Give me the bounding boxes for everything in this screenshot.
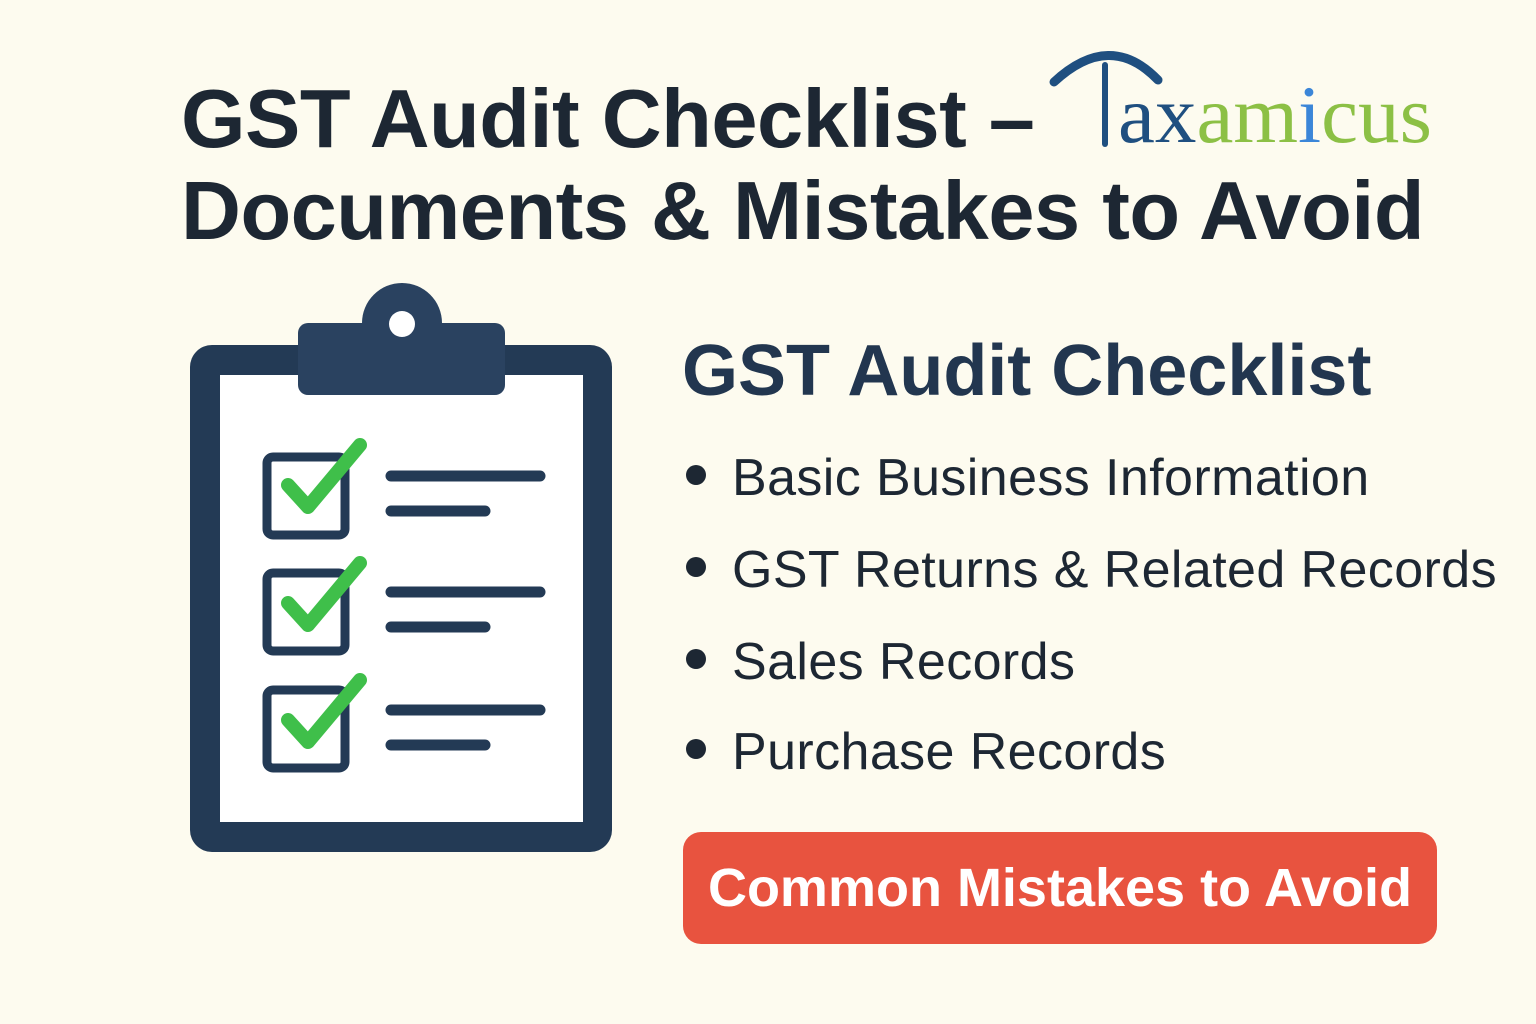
logo: Taxamicus: axamicus [1118,69,1432,160]
button: Common Mistakes to Avoid: Common Mistakes to Avoid [708,858,1412,918]
title [181,72,1424,257]
checklist items: Basic Business Information [732,449,1370,507]
checklist items: GST Returns & Related Records [732,541,1497,599]
title: GST Audit Checklist – [181,72,1034,165]
logo: Taxamicus [1050,51,1432,160]
heading: GST Audit Checklist: GST Audit Checklist [682,331,1371,411]
icon: clipboard [190,283,612,852]
checklist items: Purchase Records [732,723,1166,781]
title: Documents & Mistakes to Avoid [181,164,1424,257]
checklist items: Sales Records [732,633,1075,691]
checklist items [686,449,1497,781]
button: Common Mistakes to Avoid [683,832,1437,944]
